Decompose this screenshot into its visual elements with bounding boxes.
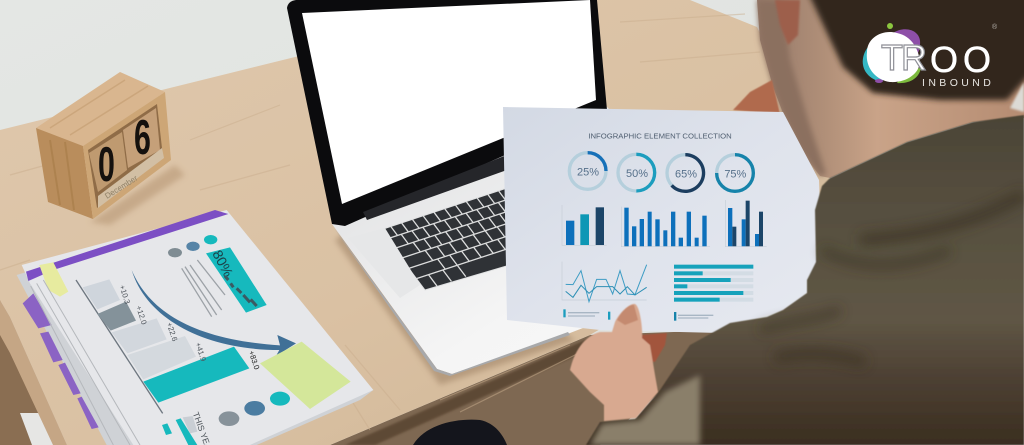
bar value labels: +22.6 [165, 321, 179, 342]
bar value labels: +10.3 [117, 284, 132, 305]
donut 25%: 25% [577, 166, 599, 178]
bar value labels: +12.0 [134, 305, 149, 326]
laptop base [332, 105, 760, 374]
lower circle icons [219, 392, 290, 426]
hinge [363, 118, 605, 220]
far hand behind paper [733, 80, 780, 114]
small bars on teal card [225, 276, 257, 306]
calendar month label: December [103, 173, 140, 201]
bar chart 1 [562, 205, 607, 245]
bar value labels: +83.0 [247, 350, 261, 371]
logo registered mark: ® [992, 23, 998, 31]
laptop [287, 0, 760, 376]
document stack on desk [17, 210, 373, 445]
fingers behind sheet [640, 333, 667, 362]
calendar digit 0: 0 [98, 137, 115, 192]
sheet title: INFOGRAPHIC ELEMENT COLLECTION [588, 131, 732, 140]
laptop lid bezel [287, 0, 607, 226]
person: neck and head [757, 0, 1024, 178]
shirt [586, 115, 1024, 445]
horizontal bar chart [674, 265, 753, 302]
side panel beside keyboard [348, 228, 420, 298]
calendar side face [36, 128, 93, 219]
laptop white screen [302, 0, 596, 204]
calendar front face [83, 92, 171, 219]
line chart [562, 262, 647, 302]
logo OO letters: OO [930, 39, 996, 80]
donut 25% [569, 153, 606, 189]
logo white blob [867, 32, 920, 82]
hand holding sheet [570, 304, 667, 421]
donut 50% [618, 154, 655, 191]
bar chart 3 [725, 200, 767, 247]
floor and dark panel below the desk [0, 300, 730, 445]
keyboard [380, 187, 555, 290]
TROO Inbound logo: R [901, 37, 927, 78]
logo INBOUND wordmark: INBOUND [922, 77, 994, 89]
logo purple blob [893, 29, 920, 60]
donut 65% [667, 155, 704, 191]
donut 65%: 65% [675, 168, 697, 180]
purple strip [26, 210, 228, 281]
teal 80 percent card [206, 247, 267, 313]
purple tabs [23, 293, 99, 429]
shirt sleeve highlight [590, 375, 700, 445]
beard shade [757, 0, 826, 176]
logo purple dot [875, 79, 883, 83]
held infographic sheet [503, 107, 822, 333]
logo green blob [897, 68, 921, 83]
thumb highlight [617, 305, 638, 325]
stepped bar chart [83, 279, 249, 403]
logo teal blob [863, 47, 892, 82]
green sticky note [260, 342, 351, 409]
80 percent text: 80% [209, 247, 237, 279]
donut 50%: 50% [626, 168, 648, 180]
curved arrow [132, 270, 296, 356]
desk side strip [0, 300, 67, 445]
TROO Inbound logo [863, 23, 998, 89]
teal bottom bars [162, 423, 172, 435]
sheet legends [563, 309, 713, 321]
calendar digit 6: 6 [134, 110, 151, 165]
bar value labels [117, 284, 261, 371]
dark knee at bottom [413, 420, 507, 445]
donut 75% [717, 155, 753, 191]
page edge lines [31, 280, 140, 445]
ear [775, 0, 800, 45]
palm and wrist [570, 304, 658, 421]
calendar top face [36, 72, 165, 146]
wooden calendar block [36, 72, 185, 225]
logo TR letters: T [881, 37, 903, 78]
wall gap beside hair [1010, 82, 1024, 112]
bar chart 2 [621, 207, 710, 247]
logo green dot [887, 23, 893, 29]
axis line [76, 280, 163, 413]
shirt fold shadows [760, 195, 1024, 362]
shadow under laptop [335, 232, 575, 385]
text lines [182, 260, 225, 317]
hair [807, 0, 1024, 100]
small yellow tab [39, 262, 68, 297]
donut 75%: 75% [724, 168, 747, 180]
top circle icons [168, 235, 217, 257]
bar value labels: +41.9 [193, 341, 208, 362]
